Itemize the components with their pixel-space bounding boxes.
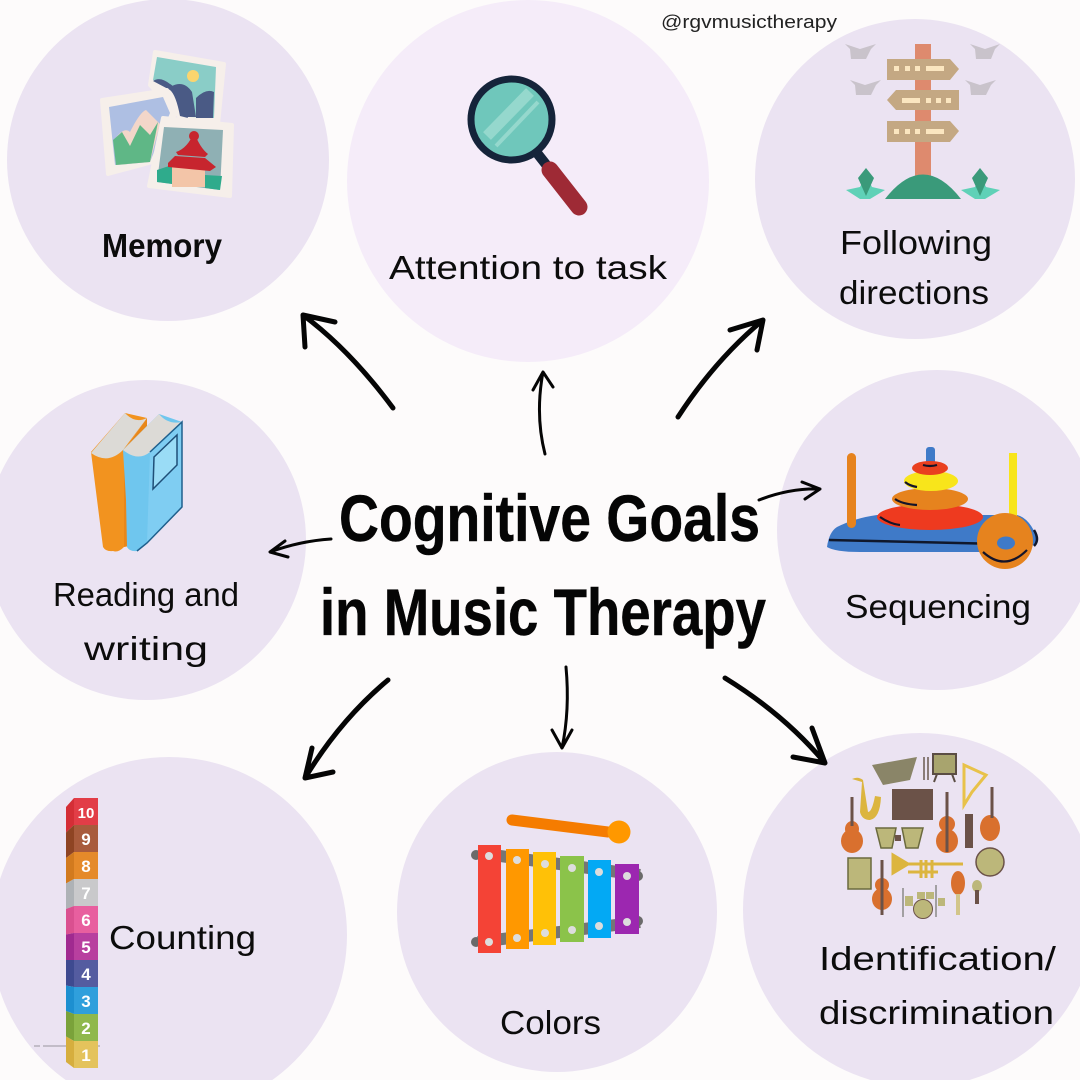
icon: signpost (845, 44, 1000, 199)
arrow: to identification (725, 678, 825, 763)
label: Attention to task: Attention to task (389, 249, 668, 286)
icon: number blocks: 9 (81, 830, 91, 849)
icon: number blocks: 2 (81, 1019, 91, 1038)
watermark handle: @rgvmusictherapy (661, 12, 837, 32)
label: Reading and writing: writing (83, 630, 208, 667)
label: Colors: Colors (500, 1004, 601, 1041)
panel: sequencing (777, 370, 1080, 690)
panel: reading and writing (0, 380, 306, 700)
label: Memory: Memory (102, 227, 223, 264)
arrow: to reading and writing (270, 539, 331, 557)
arrow: to following directions (678, 320, 763, 417)
icon: photographs (102, 52, 232, 196)
icon: number blocks (34, 798, 100, 1068)
panel: following directions (755, 19, 1075, 339)
label: Sequencing: Sequencing (845, 588, 1031, 625)
panel: memory (7, 0, 329, 321)
icon: number blocks: 1 (81, 1046, 91, 1065)
icon: magnifying glass (471, 79, 579, 207)
arrow: to attention (533, 372, 553, 454)
arrow: to memory (303, 315, 393, 408)
title: Cognitive Goals (339, 481, 760, 555)
title: in Music Therapy (320, 575, 766, 649)
arrow: to sequencing (759, 482, 820, 500)
label: Identification / discrimination: discrimination (819, 994, 1054, 1031)
icon: number blocks: 8 (81, 857, 91, 876)
icon: number blocks: 10 (78, 805, 94, 822)
panel: attention to task (347, 0, 709, 362)
panel: counting (0, 757, 347, 1080)
panel: identification / discrimination (743, 733, 1080, 1080)
label: Following directions: directions (839, 274, 989, 311)
label: Counting: Counting (109, 919, 256, 956)
icon: number blocks: 5 (81, 938, 91, 957)
icon: number blocks: 4 (81, 965, 91, 984)
arrow: to counting (305, 680, 388, 778)
label: Identification / discrimination: Identification/ (819, 940, 1057, 977)
icon: xylophone (471, 820, 643, 953)
label: Following directions (839, 224, 992, 311)
icon: number blocks: 6 (81, 911, 91, 930)
label: Reading and writing (53, 576, 239, 667)
label: Following directions: Following (840, 224, 992, 261)
icon: musical instruments (841, 754, 1004, 918)
icon: number blocks: 7 (81, 884, 91, 903)
icon: books (91, 413, 182, 552)
label: Reading and writing: Reading and (53, 576, 239, 613)
label: Identification / discrimination (819, 940, 1057, 1031)
title (320, 481, 766, 649)
icon: stacking rings toy (827, 447, 1038, 569)
icon: number blocks: 3 (81, 992, 91, 1011)
panel: colors (397, 752, 717, 1072)
arrow: to colors (552, 667, 572, 748)
